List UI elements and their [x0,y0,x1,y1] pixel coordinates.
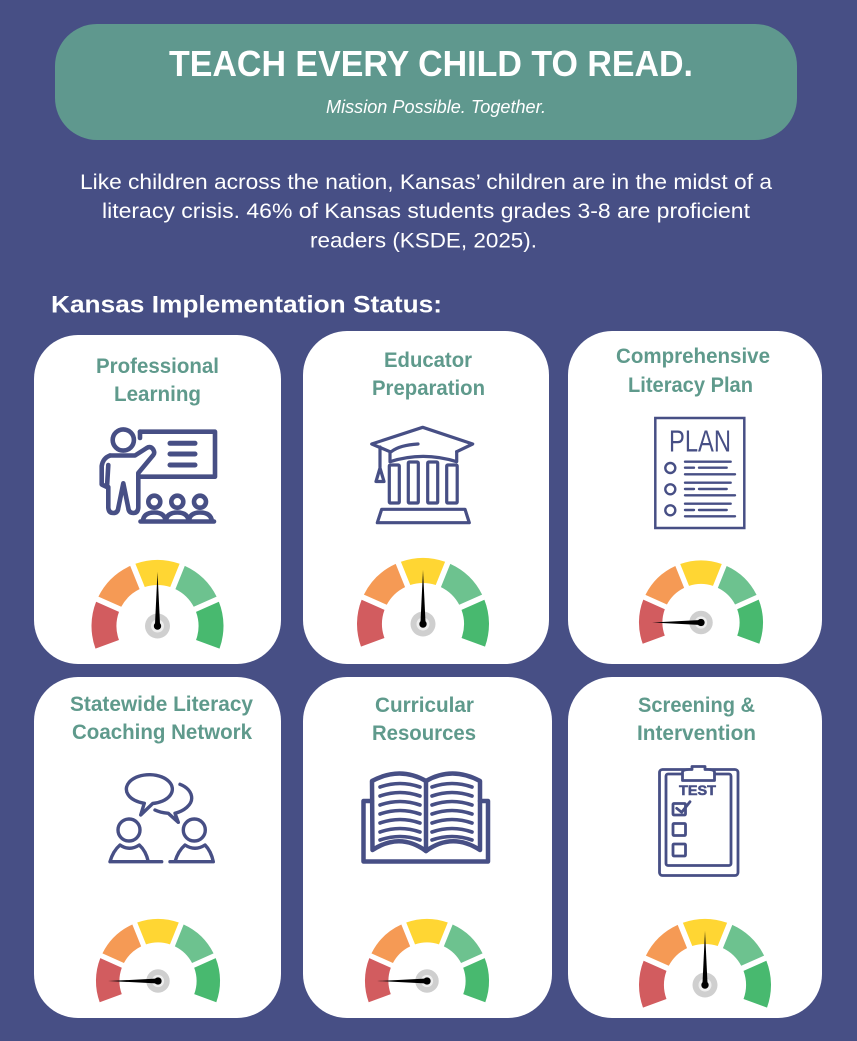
heading: Comprehensive [616,345,770,368]
heading [70,693,253,744]
banner [55,24,797,140]
heading: Resources [372,722,476,745]
heading: Professional [96,355,219,378]
section heading: Kansas Implementation Status: [51,292,442,318]
icon: test clipboard: TEST [679,783,717,798]
title: TEACH EVERY CHILD TO READ. [169,43,693,84]
panel: curricular resources [303,677,552,1018]
icon: plan document [655,418,744,528]
gauge: low level [639,560,763,644]
panel: statewide literacy coaching network [34,677,281,1018]
icon: graduation cap on columns [372,427,473,523]
intro text block: literacy crisis. 46% of Kansas students grades 3-8 are proficient [102,200,750,223]
heading: Preparation [372,377,485,400]
gauge: low level [365,919,489,1002]
icon: plan document: PLAN [669,424,731,458]
icon: test clipboard [660,766,738,876]
icon: two people talking [110,775,213,862]
intro text block: readers (KSDE, 2025). [310,230,537,252]
panel: educator preparation [303,331,549,664]
heading: Intervention [637,722,756,745]
panel: comprehensive literacy plan [568,331,822,664]
panel: screening and intervention [568,677,822,1018]
intro text block [80,171,772,252]
heading: Learning [114,383,201,406]
heading: Coaching Network [72,721,252,744]
heading [372,349,485,400]
heading: Literacy Plan [628,374,753,397]
panel: professional learning [34,335,281,664]
gauge: mid level [91,560,224,649]
gauge: mid level [639,919,771,1008]
icon: teacher at board with students [102,429,215,522]
heading: Educator [384,349,472,372]
heading [616,345,770,397]
gauge: low level [96,919,220,1002]
heading [96,355,219,406]
heading: Screening & [638,694,755,717]
heading: Statewide Literacy [70,693,253,716]
heading [637,694,756,745]
icon: open book [364,774,488,862]
heading: Curricular [375,694,474,717]
subtitle: Mission Possible. Together. [326,97,546,117]
intro text block: Like children across the nation, Kansas’ children are in the midst of a [80,171,772,194]
gauge: mid level [357,558,489,647]
heading [372,694,476,745]
